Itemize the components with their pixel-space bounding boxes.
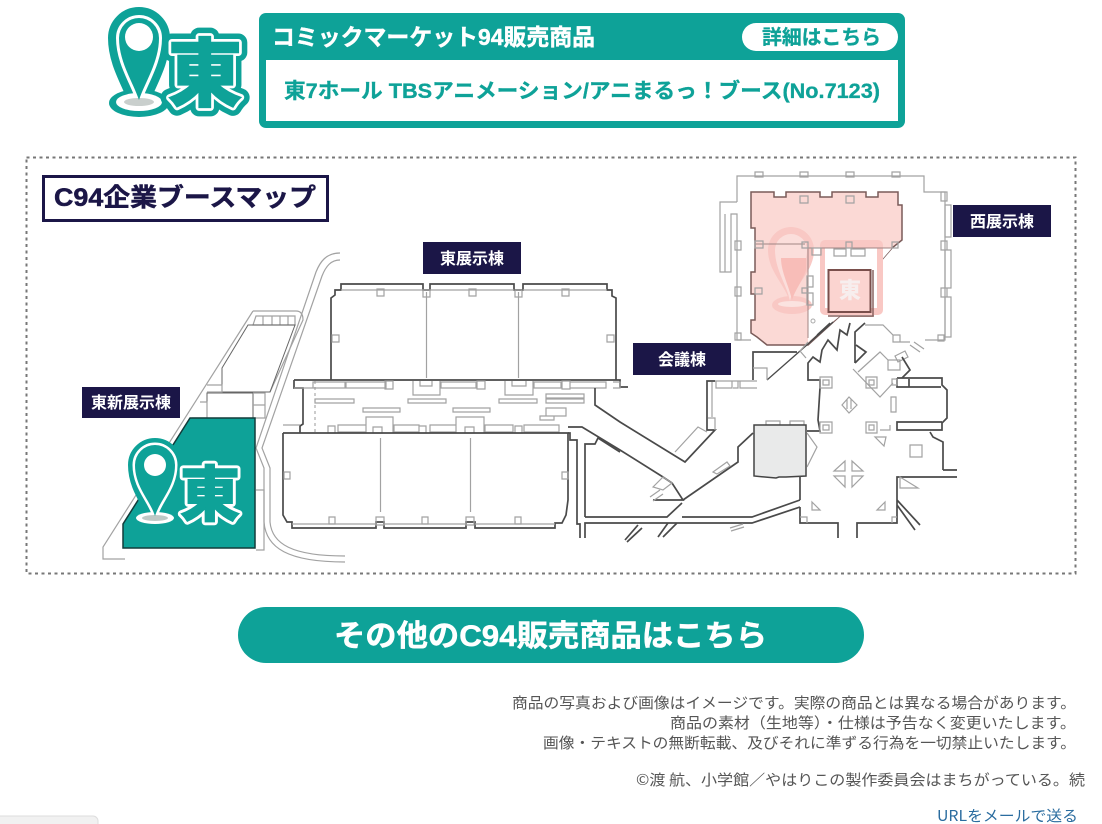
button: other C94 goods xyxy=(238,607,864,663)
text: copyright: ©渡 航、小学館／やはりこの製作委員会はまちがっている。続 xyxy=(636,769,1085,790)
icon: east location pin badge: 東 xyxy=(168,15,242,122)
gray hall block xyxy=(754,425,806,478)
west exhibition hall: 東 xyxy=(839,273,861,305)
button: other C94 goods: その他のC94販売商品はこちら xyxy=(334,620,767,653)
panel: booth map xyxy=(26,158,1076,574)
teal block xyxy=(123,418,255,548)
label: east new hall: 東新展示棟 xyxy=(91,393,171,412)
text: notes: 商品の写真および画像はイメージです。実際の商品とは異なる場合があります。 xyxy=(512,692,1076,713)
text: booth location: 東7ホール TBSアニメーション/アニまるっ！ブース(No.7123) xyxy=(284,79,880,103)
icon: east pin: 東 xyxy=(180,447,240,534)
heading: Comiket 94 goods: コミックマーケット94販売商品 xyxy=(272,24,595,50)
label: east new hall xyxy=(82,387,180,418)
label: conference tower xyxy=(633,343,731,375)
white inner court xyxy=(808,248,892,342)
map title xyxy=(44,176,328,220)
icon: east pin xyxy=(135,445,240,534)
text: notes xyxy=(512,692,1076,753)
east exhibition hall xyxy=(283,284,628,528)
north lobby wing xyxy=(853,323,938,397)
label: west hall: 西展示棟 xyxy=(970,212,1034,231)
button: details xyxy=(742,23,898,51)
panel: Comiket 94 sale info xyxy=(259,13,905,128)
road xyxy=(256,253,345,562)
label: east hall: 東展示棟 xyxy=(440,249,504,268)
pink highlighted hall xyxy=(751,192,902,345)
central atrium xyxy=(800,323,957,538)
text: notes: 画像・テキストの無断転載、及びそれに準ずる行為を一切禁止いたします。 xyxy=(543,732,1076,753)
icon: east pin: 東 xyxy=(180,447,240,534)
map title: C94企業ブースマップ xyxy=(54,183,316,212)
cut-off widget at bottom left xyxy=(0,816,98,824)
label: conference tower: 会議棟 xyxy=(658,350,706,369)
text: notes: 商品の素材（生地等）・仕様は予告なく変更いたします。 xyxy=(670,712,1076,733)
label: west hall xyxy=(953,205,1051,237)
icon: east location pin badge: 東 xyxy=(168,15,242,122)
connecting corridors xyxy=(568,381,800,542)
button: details: 詳細はこちら xyxy=(762,26,881,49)
icon: east location pin badge: 東 xyxy=(168,15,242,122)
west exhibition hall xyxy=(720,172,951,397)
watermark of pin and badge xyxy=(768,227,883,315)
inner square xyxy=(828,270,870,312)
label: east hall xyxy=(423,242,521,274)
conference tower xyxy=(708,352,817,478)
icon: east location pin badge xyxy=(109,15,242,122)
east new exhibition hall xyxy=(103,311,303,559)
